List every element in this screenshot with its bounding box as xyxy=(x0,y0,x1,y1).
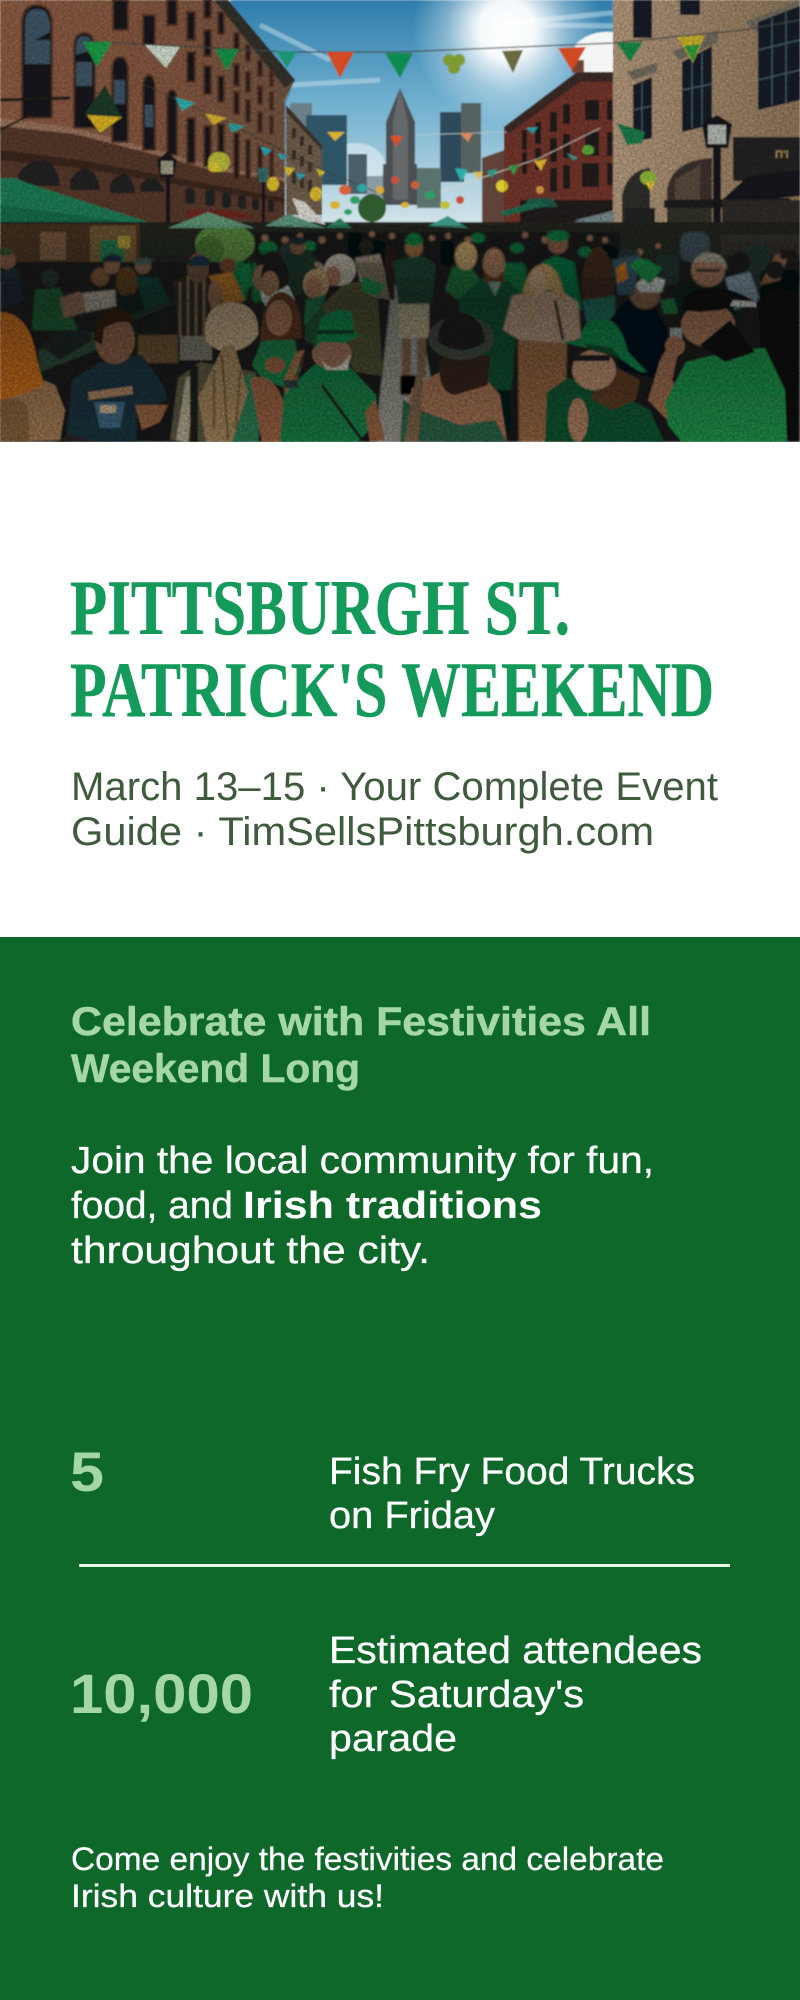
stat: 5 food trucks xyxy=(70,1440,695,1537)
tan stone building, far right: Π'I xyxy=(775,149,789,161)
man with white cap and dark shirt xyxy=(610,276,680,378)
woman in green hat and glasses xyxy=(545,319,664,442)
subtitle: Guide · TimSellsPittsburgh.com xyxy=(71,810,654,854)
section heading xyxy=(71,1000,651,1091)
smiling man in bright green tee and black cap xyxy=(648,287,787,442)
stat: 10,000 attendees: 10,000 xyxy=(70,1662,253,1725)
woman in black hat and gingham dress xyxy=(400,313,507,442)
main title: PITTSBURGH ST. xyxy=(70,564,570,651)
foreground figures, right xyxy=(400,287,787,442)
stat: 5 food trucks: on Friday xyxy=(329,1495,495,1537)
man in striped tank top xyxy=(172,253,222,360)
panel: green event details xyxy=(0,937,800,2000)
photo: St. Patrick's street crowd xyxy=(0,0,800,442)
photo grain, left buildings xyxy=(0,0,322,225)
brick building, left of street xyxy=(0,0,322,222)
foreground figures, left xyxy=(0,253,390,442)
woman in white top xyxy=(261,258,329,325)
stat: 10,000 attendees: for Saturday's xyxy=(329,1674,584,1716)
closing line xyxy=(71,1841,664,1914)
intro paragraph: Join the local community for fun, xyxy=(71,1140,654,1182)
woman with brown hair xyxy=(252,292,302,388)
olive jacket man xyxy=(322,254,390,376)
blonde woman and green tee behind xyxy=(445,230,615,328)
sky with sun xyxy=(230,0,620,230)
panel: title xyxy=(70,564,718,854)
man in green polo with hat xyxy=(280,310,385,442)
intro paragraph: food, and xyxy=(71,1185,233,1227)
woman in tan dress xyxy=(503,264,581,442)
stone ledge and lower storey xyxy=(0,118,285,222)
stat: 10,000 attendees: Estimated attendees xyxy=(329,1630,702,1672)
man with glasses and others at right xyxy=(612,250,800,442)
pavement xyxy=(375,285,442,442)
tan stone building, far right xyxy=(612,0,800,224)
intro paragraph: Irish traditions xyxy=(243,1185,542,1227)
intro paragraph xyxy=(71,1140,654,1272)
subtitle: March 13–15 · Your Complete Event xyxy=(71,765,718,809)
red brick building, right of street xyxy=(482,60,614,240)
man in green jacket xyxy=(458,248,518,430)
photo grain, right buildings xyxy=(504,0,800,225)
boy in navy graphic tee xyxy=(66,308,168,442)
distant mid-crowd figures xyxy=(208,237,395,350)
closing line: Irish culture with us! xyxy=(71,1878,384,1914)
section heading: Weekend Long xyxy=(71,1047,360,1091)
bunting flags xyxy=(83,20,800,215)
closing line: Come enjoy the festivities and celebrate xyxy=(71,1841,664,1877)
stat: 10,000 attendees: parade xyxy=(329,1718,457,1760)
intro paragraph: throughout the city. xyxy=(71,1230,430,1272)
main title xyxy=(70,564,714,733)
man in dark tee and khaki shorts xyxy=(393,236,436,395)
distant skyline with spire xyxy=(290,88,481,208)
street lamps xyxy=(156,114,732,224)
street background with umbrellas and tree xyxy=(0,178,800,282)
photo grain, crowd xyxy=(0,225,800,442)
background crowd xyxy=(0,230,800,442)
section heading: Celebrate with Festivities All xyxy=(71,1000,651,1044)
crowd shading xyxy=(0,225,800,442)
blonde woman with ponytail xyxy=(170,302,308,442)
subtitle xyxy=(71,765,718,854)
cafe patrons, left xyxy=(0,248,178,400)
person with orange hair, foreground left xyxy=(0,312,95,442)
stat: 5 food trucks: Fish Fry Food Trucks xyxy=(329,1451,695,1493)
stat: 10,000 attendees xyxy=(70,1630,702,1760)
stat: 5 food trucks: 5 xyxy=(70,1440,104,1503)
